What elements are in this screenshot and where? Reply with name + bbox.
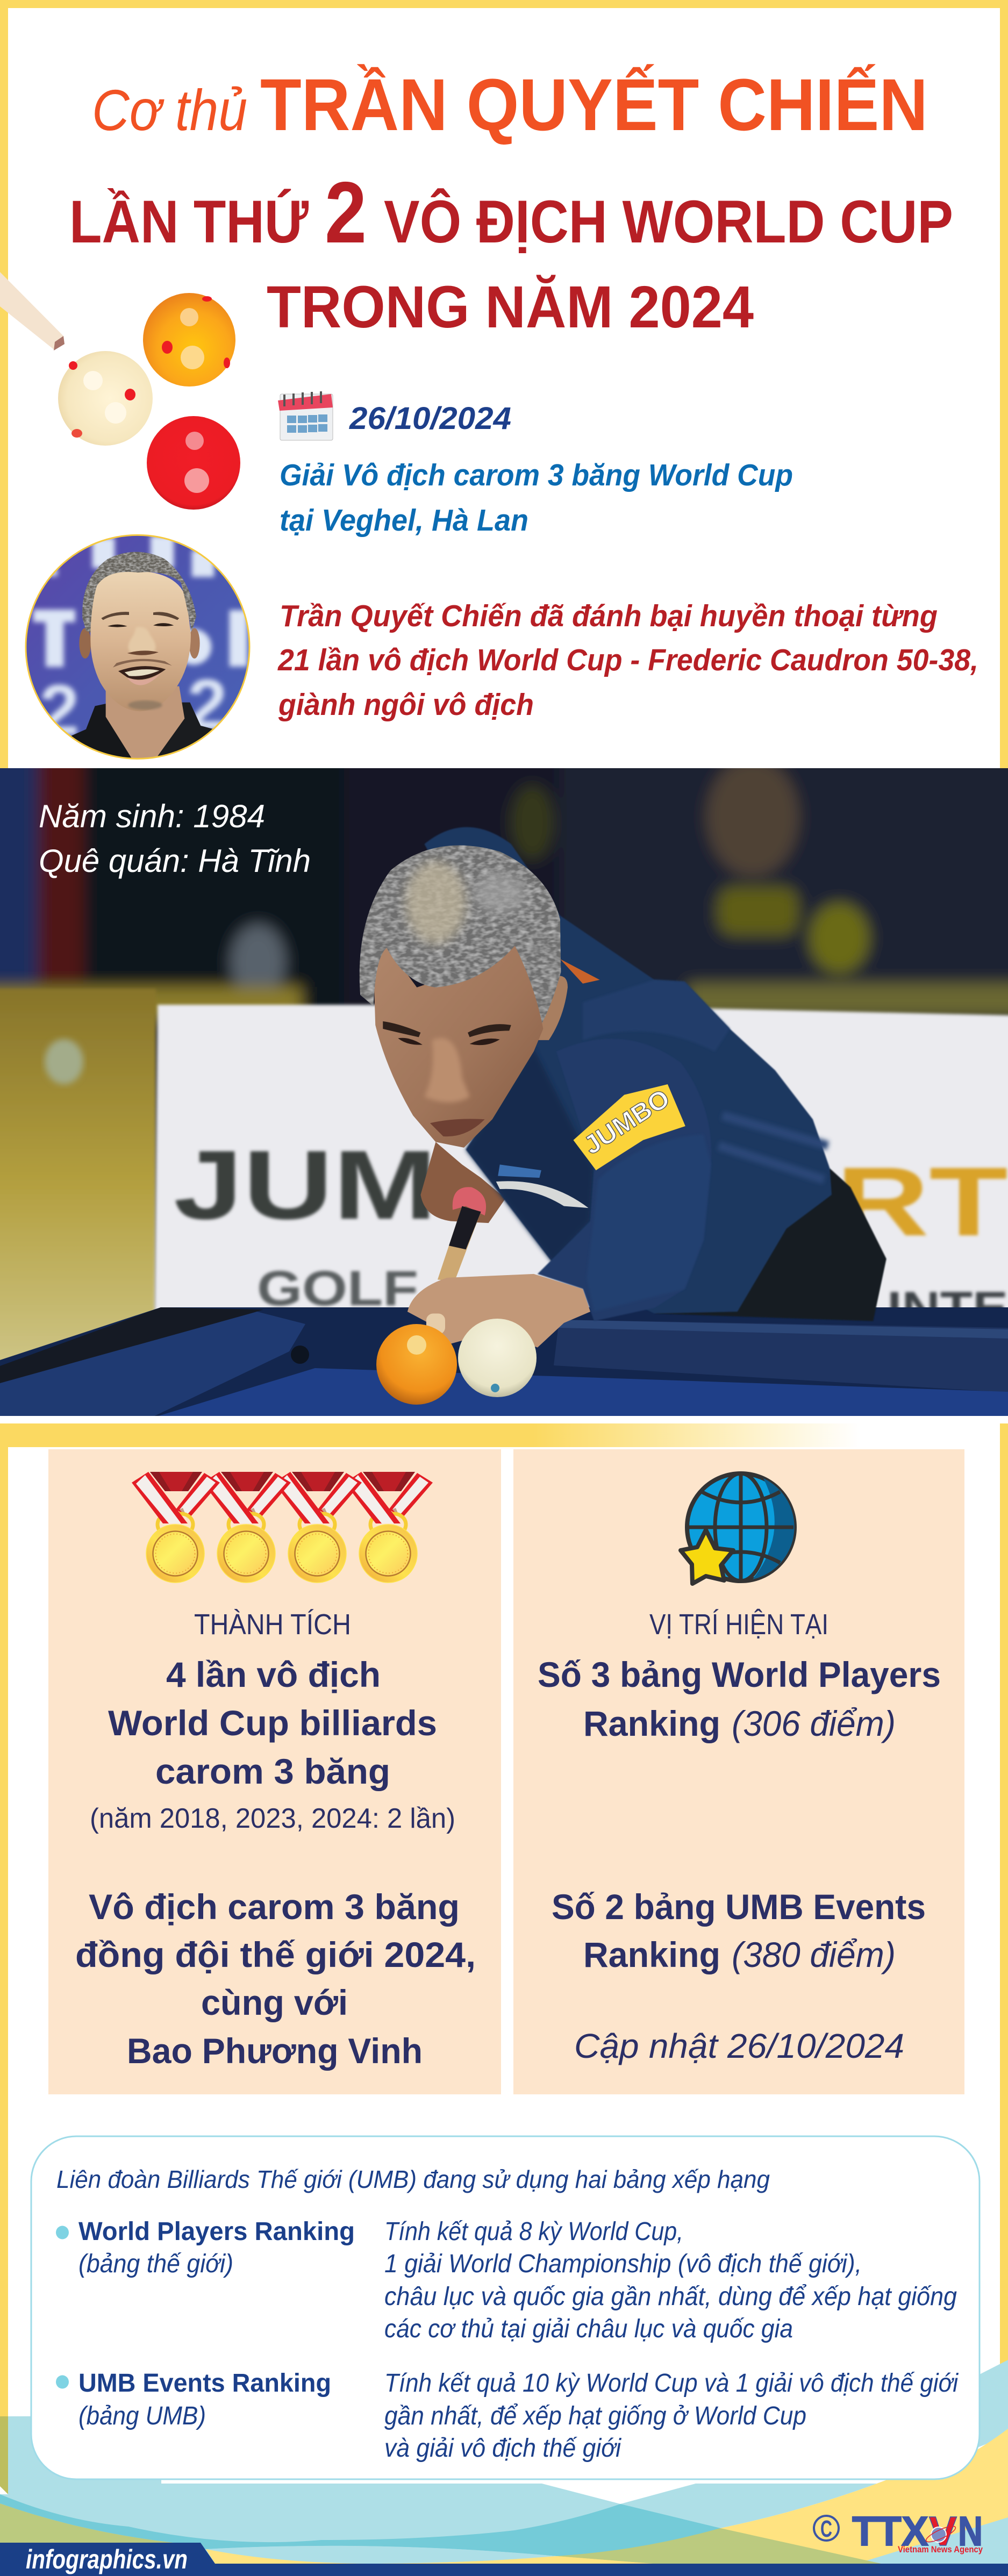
banner (154, 1005, 1008, 1333)
World Players Ranking entry: Tính kết quả 8 kỳ World Cup, (384, 2217, 683, 2246)
date: 26/10/2024 (349, 401, 511, 436)
UMB Events Ranking entry: gần nhất, để xếp hạt giống ở World Cup (384, 2402, 806, 2430)
icon: calendar (278, 391, 333, 440)
achievement: World Cup titles: World Cup billiards (108, 1703, 437, 1743)
event description (280, 458, 793, 538)
title line 2: 2 (325, 164, 367, 261)
sleeve sponsor patch: JUMBO (579, 1084, 675, 1160)
World Players Ranking entry: World Players Ranking (78, 2217, 355, 2246)
UMB Events ranking (552, 1887, 926, 1974)
achievement: World Cup titles (108, 1655, 437, 1791)
panel: UMB ranking explanation (31, 2136, 980, 2479)
website: infographics.vn (26, 2544, 188, 2574)
ears (79, 628, 91, 659)
player details: Năm sinh: 1984 (39, 798, 265, 834)
UMB Events Ranking entry (56, 2369, 959, 2463)
portrait of Trần Quyết Chiến: 2 (187, 665, 227, 745)
UMB Events ranking: Ranking (583, 1935, 720, 1974)
banner lettering: RT (836, 1147, 1008, 1256)
UMB Events ranking: (380 điểm) (732, 1935, 896, 1974)
World Players Ranking entry: các cơ thủ tại giải châu lục và quốc gia (384, 2315, 793, 2343)
title line 3: TRONG NĂM 2024 (267, 274, 754, 340)
blurred background (0, 742, 1008, 1021)
decorative yellow bar (0, 1423, 860, 1447)
match result description: 21 lần vô địch World Cup - Frederic Caudron 50-38, (277, 643, 978, 677)
chin beard (128, 700, 162, 710)
logo: TTXVN Vietnam News Agency (814, 2508, 983, 2554)
achievement: team world title (75, 1887, 476, 2071)
title line 2: VÔ ĐỊCH WORLD CUP (384, 188, 953, 255)
achievement: team world title: Vô địch carom 3 băng (89, 1887, 460, 1927)
title line 1: TRẦN QUYẾT CHIẾN (260, 63, 928, 146)
UMB Events Ranking entry: và giải vô địch thế giới (384, 2434, 621, 2463)
sleeve (538, 1039, 711, 1321)
torso (424, 827, 832, 1314)
portrait of Trần Quyết Chiến: 2 (39, 670, 79, 750)
event description: Giải Vô địch carom 3 băng World Cup (280, 458, 793, 492)
banner lettering (174, 1130, 1008, 1334)
banner lettering: GOLF (257, 1261, 418, 1316)
title line 2 (69, 164, 953, 261)
player details (39, 798, 311, 879)
bottom wave background (0, 2360, 1008, 2564)
logo: TTXVN Vietnam News Agency: TTX (852, 2508, 928, 2554)
jersey print (496, 1181, 589, 1208)
World Players Ranking entry: (bảng thế giới) (78, 2250, 233, 2278)
title line 1: Cơ thủ (92, 77, 247, 142)
World Players Ranking entry: châu lục và quốc gia gần nhất, dùng để xếp hạt giống (384, 2282, 957, 2311)
logo: TTXVN Vietnam News Agency: C (820, 2516, 832, 2542)
icon: globe with star (681, 1473, 795, 1584)
UMB Events ranking: Số 2 bảng UMB Events (552, 1887, 926, 1927)
intro sentence: Liên đoàn Billiards Thế giới (UMB) đang sử dụng hai bảng xếp hạng (56, 2165, 770, 2193)
World Players Ranking entry: 1 giải World Championship (vô địch thế giới), (384, 2250, 862, 2278)
achievements heading: THÀNH TÍCH (194, 1608, 351, 1641)
update date: Cập nhật 26/10/2024 (574, 2027, 904, 2065)
illustration: cue and three billiard balls (0, 272, 240, 510)
eyebrows (101, 612, 129, 620)
achievement: World Cup titles: 4 lần vô địch (166, 1655, 381, 1694)
panel: achievements (48, 1449, 501, 2094)
achievement: team world title: Bao Phương Vinh (127, 2031, 423, 2071)
UMB Events Ranking entry: Tính kết quả 10 kỳ World Cup và 1 giải vô địch thế giới (384, 2369, 959, 2398)
icon: four gold medals (132, 1472, 433, 1583)
World Players Ranking entry (56, 2217, 957, 2343)
achievement years: (năm 2018, 2023, 2024: 2 lần) (90, 1803, 455, 1834)
neck (106, 686, 184, 760)
title line 2: LẦN THỨ (69, 188, 309, 255)
hair (360, 845, 561, 1023)
title (69, 63, 953, 340)
neck and ear (538, 976, 568, 1040)
footer bar (0, 2543, 1008, 2576)
match result description: Trần Quyết Chiến đã đánh bại huyền thoại từng (280, 599, 938, 633)
cue (453, 1187, 486, 1215)
face (90, 571, 191, 711)
face (374, 942, 543, 1148)
player details: Quê quán: Hà Tĩnh (39, 843, 311, 879)
achievement: team world title: cùng với (201, 1983, 348, 2022)
World Players ranking: (306 điểm) (732, 1704, 896, 1743)
photo: player aiming at the table (0, 742, 1008, 1419)
match result description (277, 599, 978, 722)
match result description: giành ngôi vô địch (278, 688, 534, 722)
shirt (72, 704, 131, 758)
brows and eyes (383, 1021, 420, 1037)
achievement: team world title: đồng đội thế giới 2024, (75, 1935, 476, 1974)
logo: TTXVN Vietnam News Agency: Vietnam News Agency (898, 2544, 983, 2554)
banner lettering: INTE (887, 1283, 1008, 1334)
hand on table (408, 1274, 590, 1348)
panel: current position (513, 1449, 964, 2094)
nose (128, 627, 156, 653)
World Players ranking (538, 1655, 941, 1743)
World Players ranking: Ranking (583, 1704, 720, 1743)
billiard balls in the photo (376, 1319, 537, 1405)
World Players ranking: Số 3 bảng World Players (538, 1655, 941, 1694)
hair (82, 552, 196, 633)
event description: tại Veghel, Hà Lan (280, 503, 528, 538)
waist (654, 1168, 887, 1321)
eyes (108, 625, 127, 627)
UMB Events Ranking entry: UMB Events Ranking (78, 2369, 331, 2398)
logo: TTXVN Vietnam News Agency: V (929, 2508, 957, 2554)
achievement: World Cup titles: carom 3 băng (155, 1751, 390, 1791)
portrait of Trần Quyết Chiến (22, 532, 258, 769)
table (0, 1307, 1008, 1419)
bridge arm (420, 1142, 505, 1223)
player, drawn in local coordinates (360, 827, 887, 1348)
logo: TTXVN Vietnam News Agency: N (958, 2508, 983, 2554)
UMB Events Ranking entry: (bảng UMB) (78, 2402, 206, 2430)
mouth (430, 1119, 485, 1136)
current position heading: VỊ TRÍ HIỆN TẠI (649, 1608, 828, 1641)
banner lettering: JUM (174, 1130, 437, 1240)
moustache and mouth (113, 659, 172, 668)
